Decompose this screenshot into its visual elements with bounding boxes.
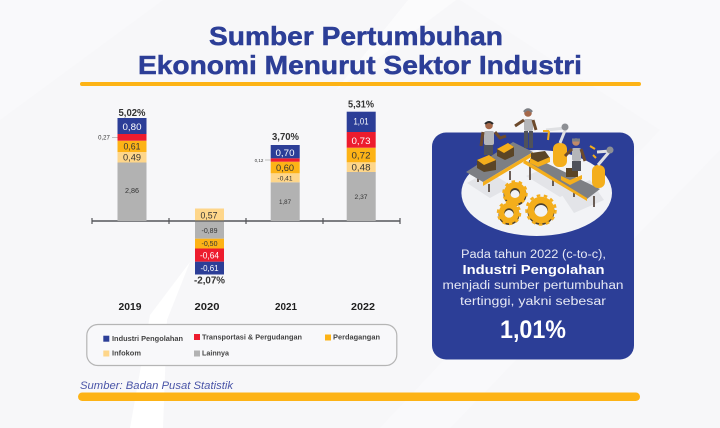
bar 2019: 5,02% (118, 108, 146, 119)
panel text: Pada tahun 2022 (c-to-c), (461, 249, 606, 261)
workers (481, 109, 585, 171)
bar 2022: 2,37 (354, 194, 368, 201)
bar 2022: 0,72 (352, 150, 370, 162)
legend labels: Transportasi & Pergudangan (202, 332, 302, 342)
illustration: factory assembly line (461, 109, 614, 236)
bar 2020: -0,61 (200, 264, 219, 273)
bar 2019: 0,80 (122, 122, 142, 133)
legend labels: Industri Pengolahan (112, 334, 183, 343)
bar 2019 (98, 108, 146, 221)
conveyor belt right (526, 160, 600, 199)
year labels: 2019 (118, 302, 142, 313)
legend labels (112, 332, 380, 358)
chart axis (92, 218, 400, 224)
robot arms (543, 124, 614, 188)
conveyor belt left (466, 142, 533, 182)
legend labels: Perdagangan (333, 332, 380, 342)
bar 2021: 0,60 (276, 163, 294, 173)
legend swatches (103, 334, 331, 356)
boxes (477, 155, 496, 172)
panel text: tertinggi, yakni sebesar (460, 296, 606, 308)
bar 2020: -2,07% (194, 276, 225, 286)
panel text: 1,01% (500, 316, 566, 344)
title: Ekonomi Menurut Sektor Industri (138, 50, 582, 80)
bar 2019: 0,27 (98, 136, 110, 142)
bar 2019: 0,49 (123, 152, 141, 164)
bar 2021: -0,41 (278, 176, 293, 182)
bar 2022 (347, 100, 376, 221)
panel text (442, 249, 624, 344)
panel text: menjadi sumber pertumbuhan (442, 280, 624, 292)
bar 2022: 0,73 (352, 136, 370, 147)
title: Sumber Pertumbuhan (209, 21, 503, 51)
bar 2020: 0,57 (200, 210, 218, 220)
legend (87, 324, 397, 366)
bar 2021: 1,87 (279, 199, 291, 206)
panel text: Industri Pengolahan (462, 263, 604, 277)
footer bar (78, 392, 640, 401)
bar 2022: 5,31% (348, 100, 374, 110)
bar 2021: 3,70% (272, 132, 299, 143)
year labels: 2020 (194, 302, 220, 313)
year labels: 2022 (351, 302, 375, 313)
bar 2021 (255, 132, 300, 221)
conveyor legs (478, 160, 594, 207)
panel: key finding (432, 109, 634, 360)
year labels: 2021 (275, 302, 297, 313)
source note: Sumber: Badan Pusat Statistik (80, 380, 234, 392)
bar 2022: 1,01 (354, 116, 368, 128)
bar chart (92, 100, 400, 313)
bar 2020 (194, 208, 225, 286)
bar 2019: 0,61 (124, 142, 140, 152)
bar 2021: 0,70 (276, 148, 294, 159)
gears (498, 182, 556, 224)
bar 2021: 0,12 (255, 158, 264, 163)
legend labels: Infokom (112, 348, 141, 358)
title underline (80, 82, 641, 86)
bar 2020: -0,50 (202, 241, 218, 248)
bar 2019: 2,86 (125, 188, 139, 195)
year labels (118, 302, 375, 313)
title (138, 21, 582, 80)
legend labels: Lainnya (202, 348, 230, 358)
conveyor floor shadows (467, 171, 512, 198)
bar 2020: -0,89 (202, 228, 218, 235)
bar 2020: -0,64 (200, 250, 219, 260)
bar 2022: 0,48 (352, 162, 370, 174)
